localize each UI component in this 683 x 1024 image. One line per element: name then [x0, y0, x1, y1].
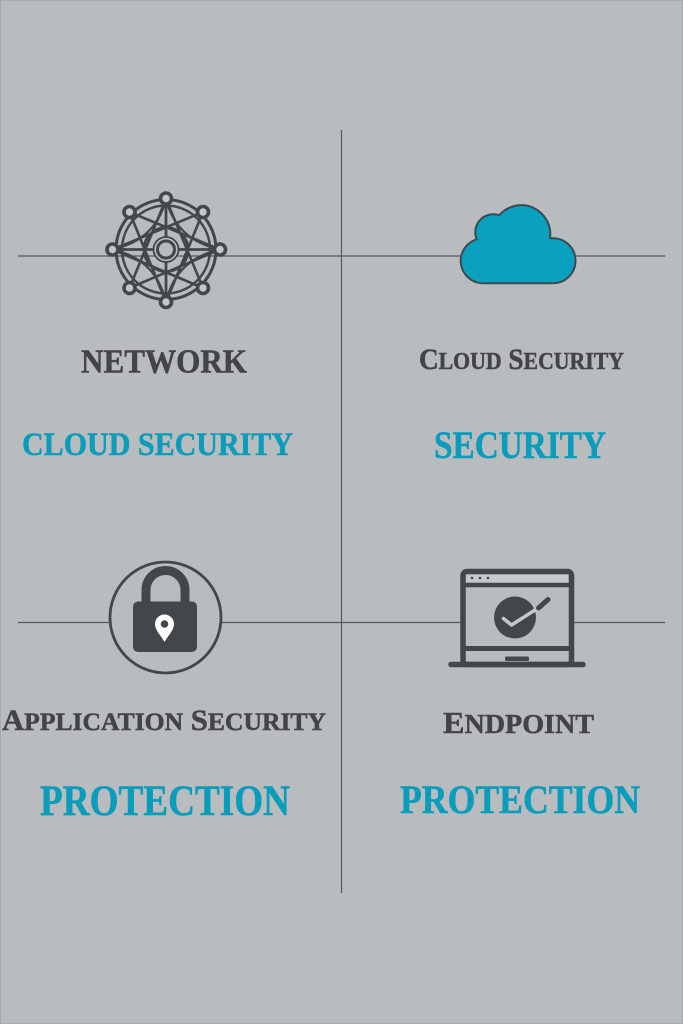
panel: endpoint [400, 572, 640, 822]
panel: application security [2, 562, 326, 825]
heading: cloud security: CLOUD SECURITY [419, 343, 624, 376]
icon: network globe [107, 193, 226, 308]
panel: cloud security [419, 205, 624, 467]
icon: padlock in circle [110, 562, 221, 673]
subheading: cloud security: CLOUD SECURITY [22, 427, 293, 463]
heading: network: NETWORK [81, 344, 248, 380]
icon: laptop with check [451, 572, 583, 664]
quadrant divider lines [18, 130, 665, 893]
heading: endpoint: ENDPOINT [443, 705, 594, 740]
heading: application security: APPLICATION SECURITY [2, 704, 326, 737]
subheading: protection: PROTECTION [40, 778, 290, 825]
subheading: protection: PROTECTION [400, 777, 640, 822]
icon: cloud [461, 205, 576, 283]
panel: network [22, 193, 293, 463]
subheading: security: SECURITY [434, 424, 606, 467]
